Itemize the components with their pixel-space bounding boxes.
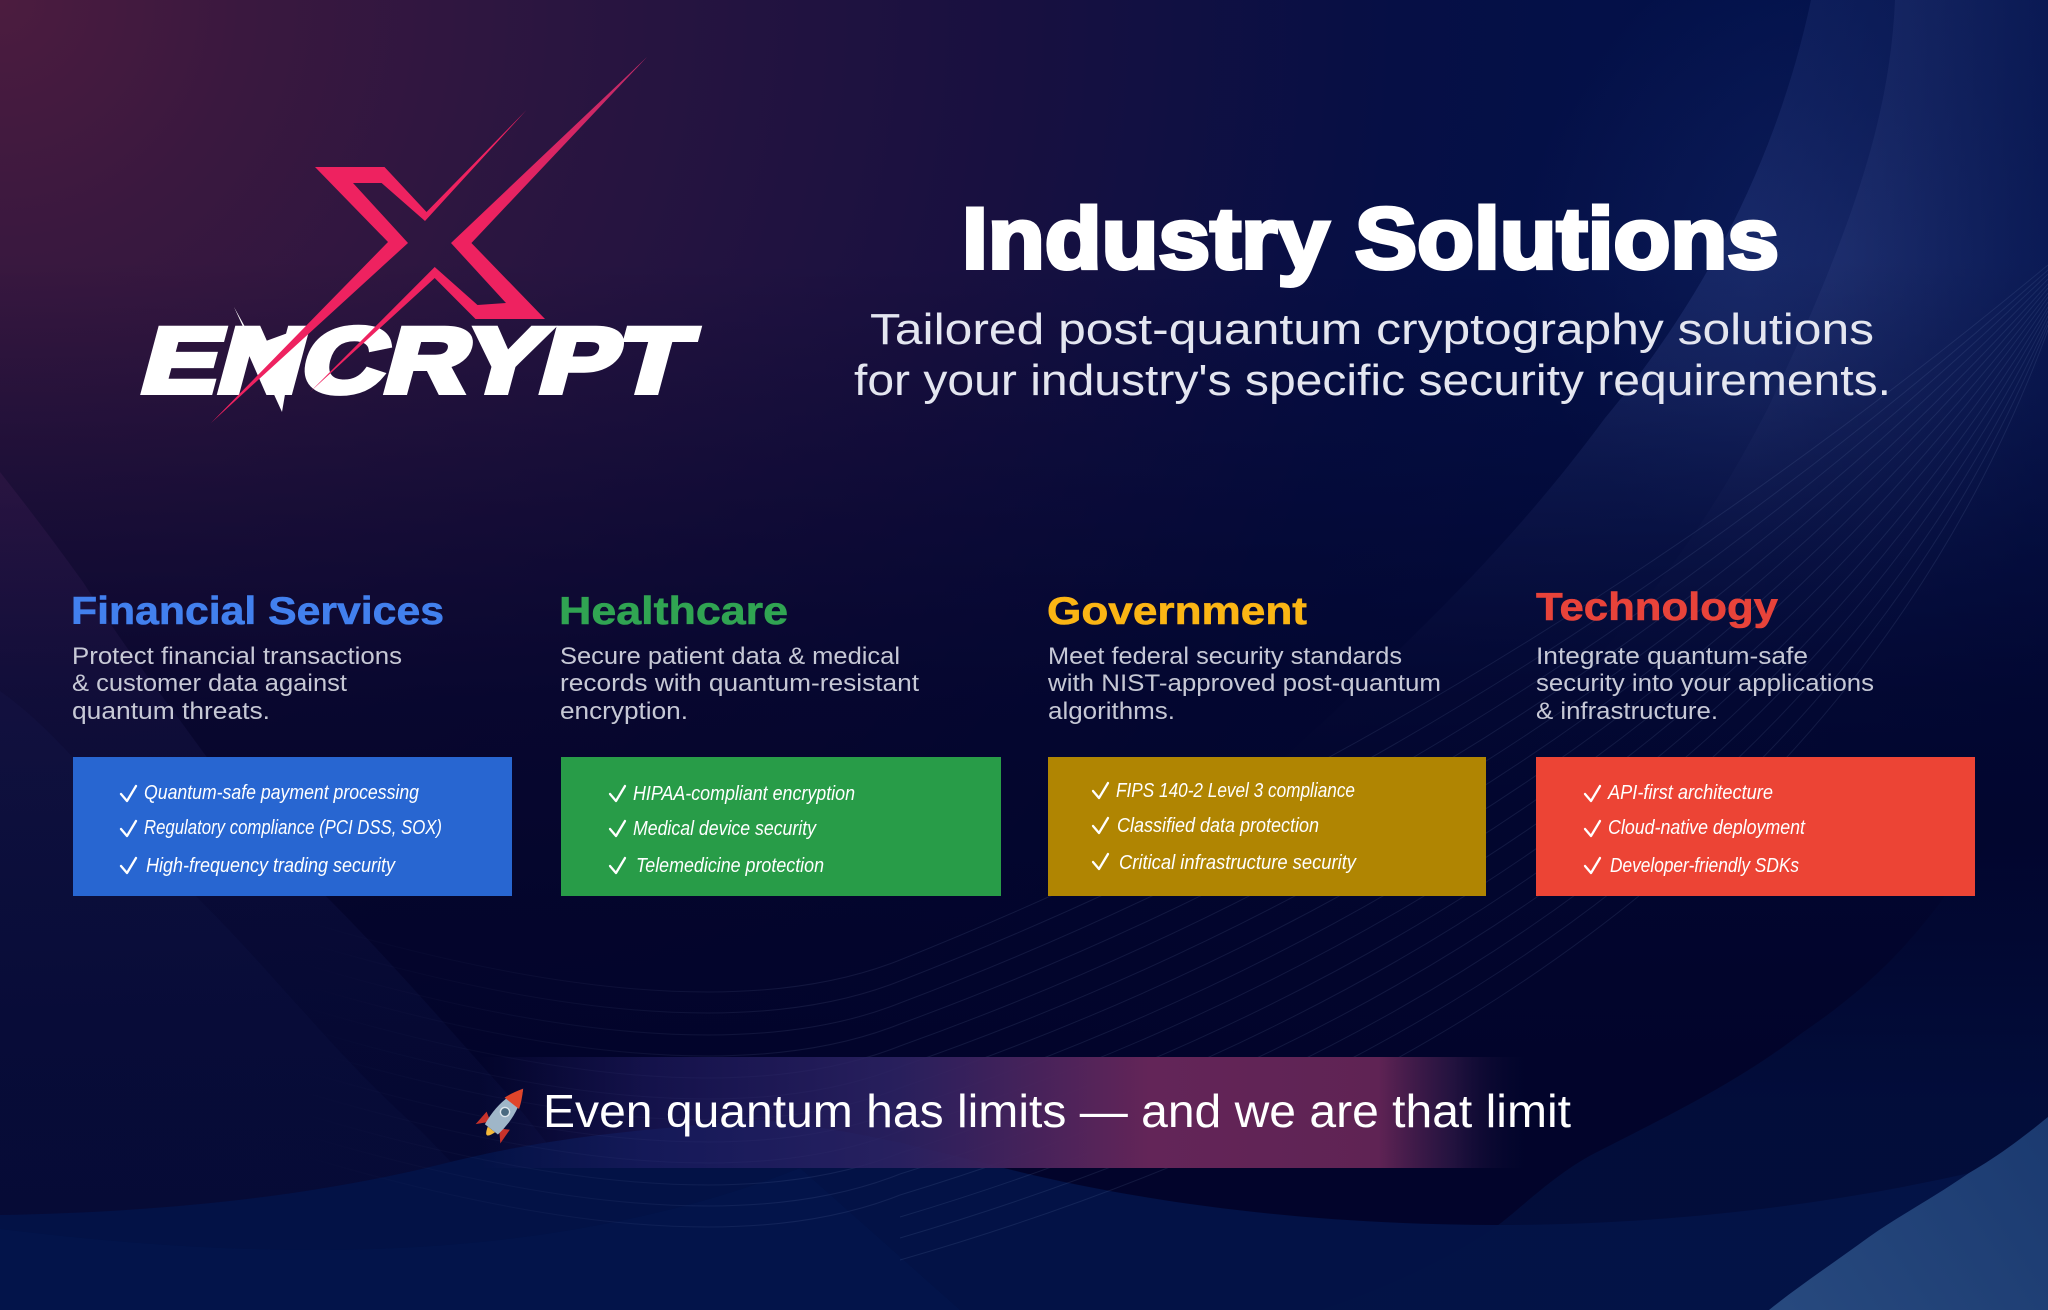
feature box: technology: API-first architecture (1607, 782, 1773, 804)
footer banner (475, 1057, 1571, 1168)
description: government (1047, 643, 1441, 725)
decorative line fan (300, 265, 2048, 1260)
subtitle: for your industry's specific security requirements. (854, 356, 1891, 405)
panel: technology (1536, 586, 1975, 896)
logo: X Encrypt (132, 57, 704, 423)
logo X mark (211, 57, 647, 423)
feature box: government (1048, 757, 1486, 896)
description: technology (1536, 643, 1874, 725)
feature box: healthcare: HIPAA-compliant encryption (633, 783, 855, 805)
description: financial services: Protect financial transactions (72, 643, 402, 670)
panel: financial services (71, 590, 512, 896)
description: financial services: quantum threats. (72, 698, 270, 725)
feature box: financial services (73, 757, 512, 896)
logo wordmark: ENCRYPT (132, 308, 704, 412)
description: government: with NIST-approved post-quantum (1047, 670, 1441, 697)
heading: healthcare: Healthcare (559, 590, 788, 633)
description: financial services: & customer data against (72, 670, 347, 697)
description: government: algorithms. (1048, 698, 1175, 725)
description: government: Meet federal security standards (1048, 643, 1402, 670)
subtitle (854, 305, 1891, 405)
icon: rocket (475, 1079, 535, 1145)
feature box: government: FIPS 140-2 Level 3 compliance (1116, 780, 1355, 802)
description: technology: & infrastructure. (1536, 698, 1718, 725)
logo spike (234, 307, 296, 412)
description: healthcare: records with quantum-resistant (560, 670, 919, 697)
heading: technology: Technology (1536, 586, 1778, 629)
feature box: technology: Cloud-native deployment (1608, 817, 1806, 839)
feature box: government: Critical infrastructure security (1119, 852, 1357, 874)
description: technology: security into your applications (1536, 670, 1874, 697)
feature box: healthcare (561, 757, 1001, 896)
heading: government: Government (1047, 590, 1307, 633)
panel: government (1047, 590, 1486, 896)
tagline: Even quantum has limits — and we are that limit (543, 1085, 1571, 1137)
heading: financial services: Financial Services (71, 590, 444, 633)
panel: healthcare (559, 590, 1001, 896)
title: Industry Solutions (962, 191, 1779, 287)
feature box: healthcare: Medical device security (633, 818, 817, 840)
description: financial services (72, 643, 402, 725)
feature box: government: Classified data protection (1117, 815, 1319, 837)
feature box: healthcare: Telemedicine protection (636, 855, 824, 877)
feature box: financial services: Regulatory compliance (PCI DSS, SOX) (144, 817, 442, 839)
feature box: financial services: High-frequency trading security (146, 855, 396, 877)
subtitle: Tailored post-quantum cryptography solutions (870, 305, 1874, 354)
feature box: technology: Developer-friendly SDKs (1610, 855, 1799, 877)
description: healthcare: encryption. (560, 698, 688, 725)
feature box: technology (1536, 757, 1975, 896)
description: technology: Integrate quantum-safe (1536, 643, 1808, 670)
description: healthcare: Secure patient data & medical (560, 643, 900, 670)
description: healthcare (560, 643, 919, 725)
feature box: financial services: Quantum-safe payment processing (144, 782, 419, 804)
